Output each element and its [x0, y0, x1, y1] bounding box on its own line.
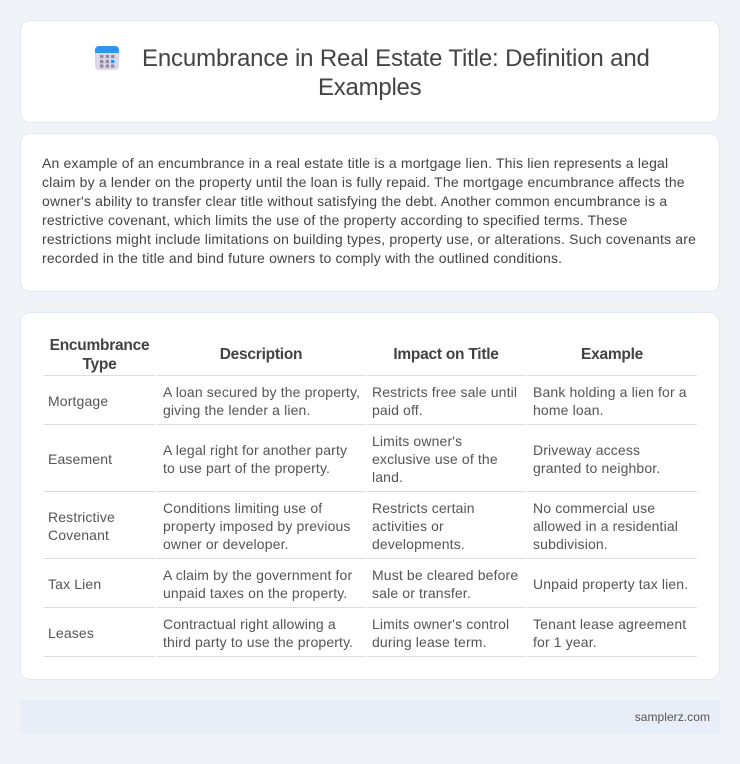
table row: Restrictive Covenant: owner or developer.: [163, 536, 289, 552]
table row: Restrictive Covenant: developments.: [372, 536, 465, 552]
heading: Encumbrance Type: [50, 337, 150, 373]
table row: Mortgage: Mortgage: [48, 393, 108, 409]
text block: encumbrance explanation: recorded in the title and bind future owners to comply with the outlined conditions.: [42, 250, 562, 266]
table row: Easement: land.: [372, 469, 403, 485]
heading: Encumbrance Type: Encumbrance: [50, 337, 149, 354]
panel: title card: [20, 20, 720, 123]
table row: Easement: exclusive use of the: [372, 451, 498, 467]
table row: Mortgage: paid off.: [372, 402, 423, 418]
table row: Restrictive Covenant: activities or: [372, 518, 444, 534]
table row: Leases: Tenant lease agreement: [533, 616, 686, 632]
table row: Restrictive Covenant: Restrictive: [48, 509, 115, 525]
table row: Tax Lien: [43, 567, 697, 608]
panel: intro paragraph: [20, 133, 720, 292]
table row: Easement: to use part of the property.: [163, 460, 330, 476]
title: Encumbrance in Real Estate Title: Definition and: [142, 45, 650, 72]
table row: Easement: Driveway access: [533, 442, 640, 458]
table row: Easement: A legal right for another party: [163, 442, 347, 458]
table row: Easement: [43, 433, 697, 492]
table row: Easement: Limits owner's: [372, 433, 462, 449]
text block: encumbrance explanation: owner's ability to transfer clear title without satisfying the debt. Another common encumbrance is a: [42, 193, 667, 209]
table row: Restrictive Covenant: No commercial use: [533, 500, 655, 516]
table row: Tax Lien: Tax Lien: [48, 576, 101, 592]
table row: Restrictive Covenant: Conditions limiting use of: [163, 500, 322, 516]
table row: Tax Lien: unpaid taxes on the property.: [163, 585, 347, 601]
text block: encumbrance explanation: restrictive covenant, which limits the use of the property according to specified terms. These: [42, 212, 627, 228]
text block: encumbrance explanation: [42, 155, 696, 266]
heading: Encumbrance Type: Type: [82, 356, 117, 373]
table row: Mortgage: [43, 384, 697, 425]
title: Examples: [318, 74, 421, 101]
table row: Mortgage: giving the lender a lien.: [163, 402, 310, 418]
table row: Restrictive Covenant: allowed in a residential: [533, 518, 678, 534]
heading: Description: Description: [220, 346, 302, 363]
text block: encumbrance explanation: restrictions might include limitations on building types, property use, or alterations. Such covenants are: [42, 231, 696, 247]
table row: Tax Lien: Must be cleared before: [372, 567, 518, 583]
table row: Leases: during lease term.: [372, 634, 487, 650]
table row: Mortgage: Restricts free sale until: [372, 384, 517, 400]
table row: Restrictive Covenant: Restricts certain: [372, 500, 475, 516]
table row: Restrictive Covenant: [43, 500, 697, 559]
table row: Leases: third party to use the property.: [163, 634, 353, 650]
table row: Restrictive Covenant: Covenant: [48, 527, 109, 543]
title: [142, 45, 650, 101]
heading: Example: Example: [581, 346, 643, 363]
footer text: samplerz.com: samplerz.com: [635, 710, 710, 724]
footer bar: [20, 700, 720, 734]
table row: Leases: Contractual right allowing a: [163, 616, 336, 632]
table row: Leases: Leases: [48, 625, 94, 641]
table row: Mortgage: Bank holding a lien for a: [533, 384, 687, 400]
heading: Impact on Title: Impact on Title: [393, 346, 499, 363]
table row: Mortgage: home loan.: [533, 402, 604, 418]
table row: Restrictive Covenant: subdivision.: [533, 536, 608, 552]
table row: Mortgage: A loan secured by the property,: [163, 384, 360, 400]
table row: Tax Lien: Unpaid property tax lien.: [533, 576, 688, 592]
table row: Leases: Limits owner's control: [372, 616, 509, 632]
table row: Tax Lien: A claim by the government for: [163, 567, 352, 583]
table row: Leases: for 1 year.: [533, 634, 597, 650]
table row: Easement: granted to neighbor.: [533, 460, 660, 476]
text block: encumbrance explanation: claim by a lender on the property until the loan is fully repaid. The mortgage encumbrance affects the: [42, 174, 685, 190]
text block: encumbrance explanation: An example of an encumbrance in a real estate title is a mortgage lien. This lien represents a legal: [42, 155, 668, 171]
table row: Tax Lien: sale or transfer.: [372, 585, 471, 601]
panel: encumbrance table: [20, 312, 720, 680]
table header row: [43, 337, 697, 376]
table row: Leases: [43, 616, 697, 657]
icon: calendar: [95, 46, 119, 70]
table row: Easement: Easement: [48, 451, 112, 467]
table row: Restrictive Covenant: property imposed by previous: [163, 518, 351, 534]
